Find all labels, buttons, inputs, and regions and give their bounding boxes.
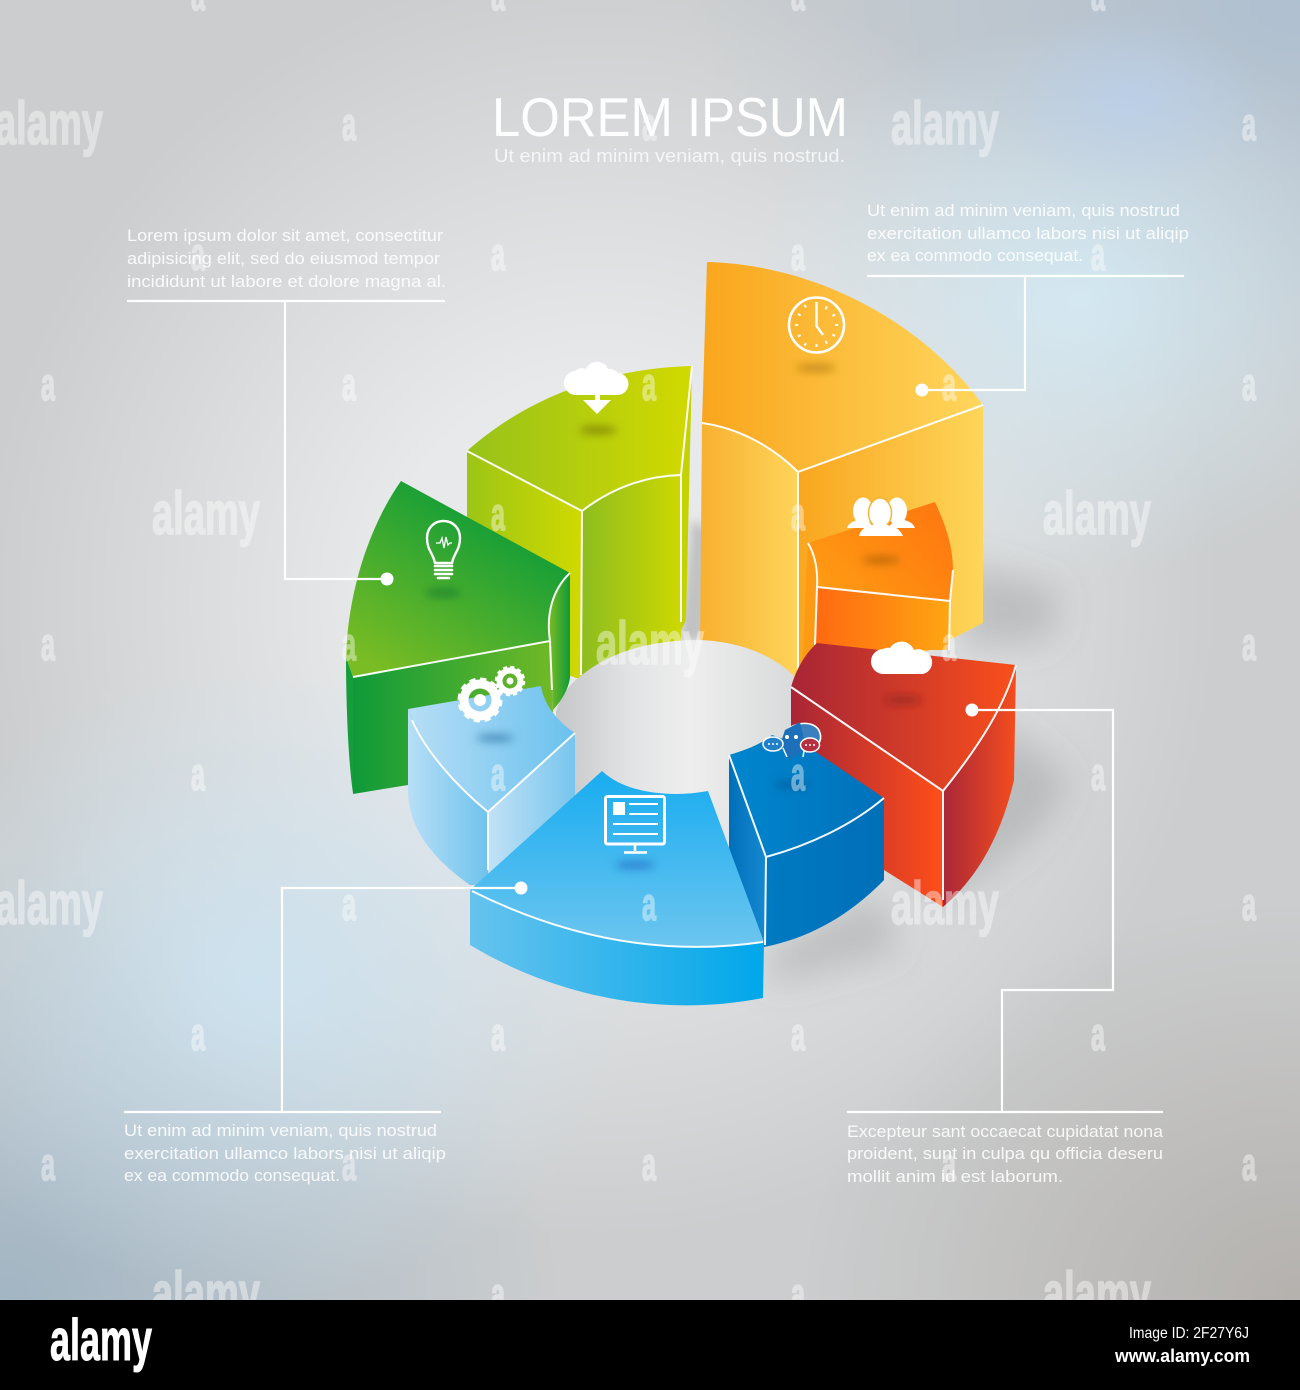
watermarks: a bbox=[491, 488, 505, 540]
connector: top right bbox=[867, 276, 1184, 396]
segment: red bbox=[791, 643, 1016, 907]
icon: chat bubbles bbox=[763, 722, 821, 760]
watermarks: a bbox=[791, 1008, 805, 1060]
watermarks: a bbox=[191, 748, 205, 800]
footer bar bbox=[0, 1300, 1300, 1390]
text block: top right: ex ea commodo consequat. bbox=[867, 247, 1083, 265]
text block: bottom right: mollit anim id est laborum. bbox=[847, 1168, 1063, 1186]
text block: bottom right bbox=[847, 1123, 1164, 1186]
watermarks: a bbox=[791, 748, 805, 800]
watermarks: a bbox=[791, 228, 805, 280]
lime shadow bbox=[680, 520, 710, 640]
connector: right bbox=[847, 704, 1163, 1112]
watermarks: a bbox=[1242, 878, 1256, 930]
text block: top right bbox=[867, 202, 1189, 265]
text block: bottom right: proident, sunt in culpa qu officia deseru bbox=[847, 1145, 1163, 1163]
text block: bottom left: Ut enim ad minim veniam, quis nostrud bbox=[124, 1122, 437, 1140]
icon: light bulb bbox=[427, 521, 460, 578]
watermarks: alamy bbox=[596, 610, 704, 677]
ground shadows bbox=[766, 560, 1070, 985]
icon: gears bbox=[460, 668, 524, 720]
watermarks: a bbox=[191, 228, 205, 280]
segment: green bbox=[346, 481, 570, 794]
watermarks: a bbox=[942, 358, 956, 410]
text block: top left: incididunt ut labore et dolore magna al. bbox=[127, 273, 446, 291]
watermarks: a bbox=[642, 1138, 656, 1190]
watermarks: a bbox=[642, 358, 656, 410]
text block: top left: adipisicing elit, sed do eiusmod tempor bbox=[127, 250, 441, 268]
subtitle: Ut enim ad minim veniam, quis nostrud. bbox=[494, 146, 845, 166]
watermarks: a bbox=[1091, 748, 1105, 800]
text block: bottom left bbox=[124, 1122, 446, 1185]
segment: pale blue bbox=[408, 686, 575, 885]
icon: monitor bbox=[606, 796, 664, 852]
watermarks: alamy bbox=[152, 480, 260, 547]
watermarks: a bbox=[1242, 358, 1256, 410]
watermarks: alamy bbox=[1043, 1260, 1151, 1327]
connector: bottom left bbox=[124, 882, 528, 1112]
icon: people bbox=[847, 498, 915, 536]
segment: large orange bbox=[700, 262, 983, 690]
text block: bottom left: ex ea commodo consequat. bbox=[124, 1167, 340, 1185]
watermarks: a bbox=[1091, 1008, 1105, 1060]
icon: cloud download bbox=[564, 362, 629, 414]
text block: bottom left: exercitation ullamco labors nisi ut aliqip bbox=[124, 1145, 446, 1163]
watermarks: a bbox=[1242, 618, 1256, 670]
watermarks: a bbox=[491, 1268, 505, 1320]
watermarks: alamy bbox=[1043, 480, 1151, 547]
watermarks: a bbox=[1091, 228, 1105, 280]
icon shadows bbox=[425, 364, 922, 868]
watermarks: a bbox=[942, 618, 956, 670]
watermarks: a bbox=[191, 1008, 205, 1060]
watermarks: a bbox=[342, 618, 356, 670]
watermarks: a bbox=[41, 358, 55, 410]
watermarks: a bbox=[342, 358, 356, 410]
watermarks: alamy bbox=[0, 90, 103, 157]
watermarks: a bbox=[41, 1138, 55, 1190]
footer logo: alamy bbox=[50, 1308, 152, 1373]
watermarks: alamy bbox=[891, 870, 999, 937]
watermarks: a bbox=[41, 618, 55, 670]
site url: www.alamy.com bbox=[1114, 1346, 1250, 1366]
segment: dark orange bbox=[798, 502, 953, 680]
watermarks: alamy bbox=[891, 90, 999, 157]
segment: lime bbox=[467, 366, 710, 680]
text block: top left: Lorem ipsum dolor sit amet, consectitur bbox=[127, 227, 444, 245]
watermarks: a bbox=[1242, 1138, 1256, 1190]
inner ring floor bbox=[556, 640, 800, 800]
icon: clock bbox=[789, 298, 844, 352]
icon: cloud bbox=[871, 642, 932, 674]
watermarks: alamy bbox=[0, 870, 103, 937]
watermarks: a bbox=[491, 748, 505, 800]
image id: Image ID: 2F27Y6J bbox=[1129, 1325, 1249, 1342]
text block: top left bbox=[127, 227, 446, 291]
watermarks: a bbox=[642, 98, 656, 150]
watermarks: a bbox=[1242, 98, 1256, 150]
segment: large blue bbox=[470, 771, 764, 1005]
text block: bottom right: Excepteur sant occaecat cupidatat nona bbox=[847, 1123, 1164, 1141]
watermarks: a bbox=[342, 98, 356, 150]
connector: top left bbox=[127, 301, 445, 586]
watermarks: a bbox=[791, 488, 805, 540]
title: LOREM IPSUM bbox=[492, 86, 848, 148]
watermarks: a bbox=[642, 878, 656, 930]
watermarks: a bbox=[491, 228, 505, 280]
watermarks: a bbox=[491, 1008, 505, 1060]
watermarks: a bbox=[342, 1138, 356, 1190]
segment: dark blue bbox=[729, 735, 884, 947]
watermarks: a bbox=[942, 1138, 956, 1190]
watermarks: a bbox=[342, 878, 356, 930]
watermarks: alamy bbox=[152, 1260, 260, 1327]
text block: top right: Ut enim ad minim veniam, quis nostrud bbox=[867, 202, 1180, 220]
watermarks: a bbox=[791, 1268, 805, 1320]
text block: top right: exercitation ullamco labors nisi ut aliqip bbox=[867, 225, 1189, 243]
